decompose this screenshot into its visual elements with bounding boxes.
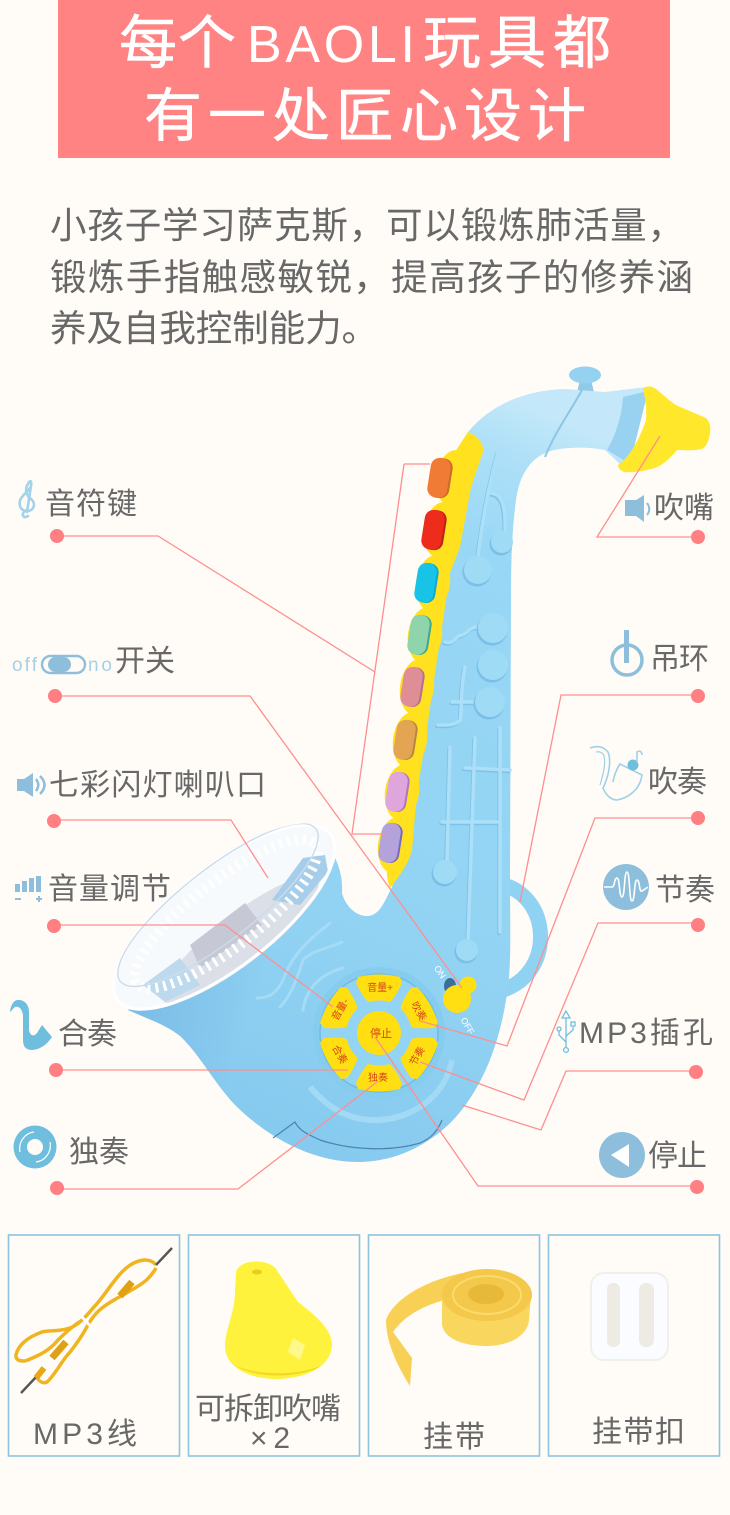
icon: usb (557, 1011, 575, 1052)
leader dots (47, 529, 705, 1195)
sax body (128, 387, 647, 1162)
button: blow mode: 吹奏 (408, 999, 430, 1023)
label: hanging ring: 吊环 (650, 643, 709, 676)
panel: detachable mouthpiece: ×2 (250, 1422, 290, 1455)
icon: speaker (625, 495, 649, 522)
glass bell (117, 823, 336, 1011)
title line 1 (119, 11, 611, 76)
title line 2: 有一处匠心设计 (144, 84, 586, 149)
label: hanging ring (612, 630, 709, 676)
intro paragraph: 小孩子学习萨克斯，可以锻炼肺活量， (50, 205, 684, 246)
caption: 挂带 (423, 1421, 485, 1454)
label: rhythm (603, 864, 715, 910)
label: mp3 jack: MP3插孔 (579, 1017, 713, 1050)
neck seam (545, 390, 582, 457)
mouthpiece part (225, 1262, 332, 1379)
panel: detachable mouthpiece (188, 1235, 360, 1456)
icon: disc (14, 1126, 56, 1168)
saxophone illustration (84, 366, 710, 1162)
strap roll (386, 1269, 532, 1386)
icon: speaker (17, 773, 44, 797)
buckle (591, 1273, 668, 1360)
embossed music notes (432, 452, 513, 964)
neck collar (607, 391, 648, 464)
label: stop: 停止 (648, 1140, 707, 1173)
icon: treble clef (20, 481, 34, 517)
cable (16, 1248, 172, 1393)
label: volume: 音量调节 (48, 873, 171, 906)
collar shadow (629, 428, 646, 463)
title line 1: 玩具都 (423, 11, 611, 76)
panel: strap buckle (548, 1235, 720, 1456)
label: power switch (12, 645, 175, 678)
label: rhythm: 节奏 (655, 874, 715, 907)
button: stop: 停止 (370, 1026, 392, 1040)
caption: 挂带扣 (592, 1416, 685, 1449)
label: mp3 jack (557, 1011, 713, 1052)
intro paragraph: 锻炼手指触感敏锐，提高孩子的修养涵 (50, 257, 693, 298)
label: note keys: 音符键 (45, 488, 137, 521)
panel: strap (368, 1235, 540, 1456)
label: ensemble: 合奏 (58, 1018, 117, 1051)
yellow key strip (387, 432, 483, 888)
body seam (273, 1120, 442, 1149)
button: rhythm: 节奏 (407, 1045, 428, 1068)
control panel (313, 967, 445, 1099)
button: ensemble: 合奏 (329, 1042, 351, 1066)
icon: toggle (42, 656, 85, 673)
label: stop (599, 1132, 707, 1178)
title line 1: BAOLI (247, 16, 415, 74)
key bumps (374, 448, 474, 875)
label: ensemble (10, 1000, 117, 1051)
label: note keys (20, 481, 137, 521)
label: mouthpiece (625, 492, 714, 525)
title banner (58, 0, 670, 158)
label: mouthpiece: 吹嘴 (654, 492, 714, 525)
title line 1: 每个 (119, 11, 236, 76)
icon: sound wave circle (603, 864, 649, 910)
leader lines (54, 436, 698, 1189)
label: blow: 吹奏 (648, 766, 707, 799)
icon: power ring (612, 630, 642, 675)
icon: small sax (10, 1000, 52, 1050)
icon: sax outline with note (590, 747, 642, 800)
intro paragraph (50, 205, 693, 349)
on off switch (432, 964, 477, 1037)
label: solo (14, 1126, 129, 1169)
on off switch: OFF (459, 1016, 477, 1037)
on off switch: ON (432, 964, 448, 980)
bell shading (128, 950, 330, 1148)
mouthpiece (618, 386, 710, 472)
label: solo: 独奏 (69, 1136, 129, 1169)
label: light horn: 七彩闪灯喇叭口 (49, 769, 266, 802)
icon: volume bars (15, 876, 42, 902)
label: power switch: 开关 (115, 645, 175, 678)
lower arc ridge (310, 1060, 452, 1120)
label: blow (590, 747, 707, 800)
label: power switch: no (88, 655, 112, 676)
top knob (569, 366, 601, 392)
intro paragraph: 养及自我控制能力。 (50, 308, 378, 349)
caption: 可拆卸吹嘴 (195, 1393, 341, 1426)
button: solo: 独奏 (368, 1071, 388, 1084)
note keys (377, 457, 454, 864)
hanging ring (500, 884, 541, 991)
bell swirls (257, 923, 343, 1010)
caption: MP3线 (33, 1418, 137, 1451)
icon: back button (599, 1132, 645, 1178)
panel: mp3 cable (8, 1235, 180, 1456)
label: power switch: off (12, 655, 38, 676)
button: volume up: 音量+ (367, 981, 393, 994)
button: volume down: 音量- (329, 996, 352, 1023)
